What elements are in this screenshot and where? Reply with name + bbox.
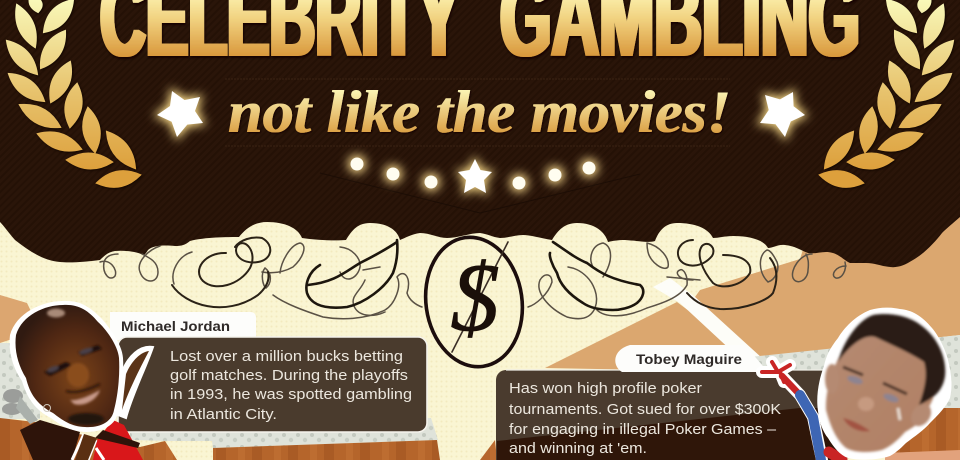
illustration: Jordan body and arm — [2, 347, 153, 460]
description: Tobey Maguire — [496, 370, 846, 460]
wooden table pieces — [0, 408, 960, 460]
laurel wreath: left — [7, 0, 140, 187]
name tag: Michael Jordan — [110, 312, 256, 340]
subtitle: not like the movies! — [228, 79, 731, 145]
panel: Tobey Maguire — [496, 345, 846, 460]
glowing stars and lights — [157, 91, 805, 193]
name tag: Michael Jordan: Michael Jordan — [121, 318, 230, 334]
mottled stone bands — [0, 335, 960, 448]
name tag: Tobey Maguire — [615, 345, 768, 372]
name tag: Tobey Maguire: Tobey Maguire — [636, 351, 742, 367]
description: Tobey Maguire: Has won high profile poker — [509, 380, 702, 397]
panel: Michael Jordan — [110, 312, 427, 432]
row of lights — [348, 155, 598, 192]
dark brown header with scalloped edge — [0, 0, 960, 267]
tan and white backdrop shapes — [0, 200, 960, 372]
dollar sign: $ — [450, 244, 500, 352]
description: Michael Jordan: Lost over a million bucks betting — [170, 348, 403, 365]
description: Michael Jordan: in 1993, he was spotted gambling — [170, 386, 412, 403]
icon: Michael Jordan portrait — [10, 301, 123, 432]
description: Michael Jordan — [118, 337, 427, 432]
calligraphic flourishes — [100, 231, 846, 373]
icon: golf clubs — [2, 389, 38, 424]
laurel wreath: right — [820, 0, 953, 187]
description: Michael Jordan: in Atlantic City. — [170, 406, 277, 423]
description: Michael Jordan: golf matches. During the playoffs — [170, 367, 408, 384]
icon: right star — [760, 92, 805, 137]
description: Tobey Maguire: and winning at 'em. — [509, 440, 647, 457]
icon: Spider-Man arm — [762, 362, 842, 460]
dollar oval — [417, 231, 531, 373]
description: Tobey Maguire: for engaging in illegal Poker Games – — [509, 421, 777, 438]
cream textured background — [0, 180, 960, 460]
icon: left star — [157, 91, 203, 137]
icon: centre star — [458, 159, 492, 193]
icon: Tobey Maguire portrait — [817, 308, 951, 460]
description: Tobey Maguire: tournaments. Got sued for over $300K — [509, 401, 781, 418]
icon: raised arm — [118, 347, 153, 418]
